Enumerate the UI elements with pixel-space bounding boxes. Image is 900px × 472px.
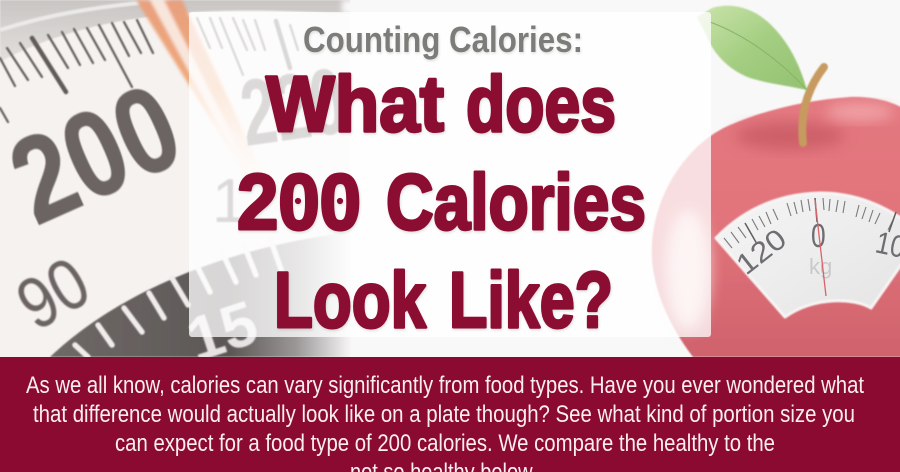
plate major ticks [745, 198, 896, 244]
dark dial arc [50, 232, 350, 357]
stem [802, 67, 824, 143]
illustration: apple with scale [652, 6, 900, 357]
needle [136, 0, 262, 176]
number 220: 220 [234, 47, 351, 166]
plate number 0: 0 [811, 218, 826, 255]
headline line 3 [274, 255, 613, 344]
apple dimple shadow [735, 122, 845, 150]
title block [237, 19, 646, 344]
dial arc numbers: 15 [179, 288, 266, 375]
number 90: 90 [4, 243, 103, 346]
headline line 2: 200 [237, 157, 361, 246]
headline line 3: Like? [449, 255, 613, 344]
headline line 2: Calories [386, 157, 646, 246]
headline line 1 [266, 59, 616, 148]
headline line 1: What [266, 59, 444, 148]
apple left highlight [666, 210, 710, 330]
headline line 1: does [466, 59, 616, 148]
plate unit: kg [809, 254, 832, 279]
plate pointer [815, 200, 826, 296]
apple body [652, 97, 900, 357]
leaf vein [710, 22, 807, 90]
scale plate [716, 193, 900, 317]
dial arc ticks [75, 238, 284, 357]
number 1: 1 [212, 167, 246, 236]
headline line 2 [237, 157, 646, 246]
plate ticks [724, 198, 893, 248]
headline line 3: Look [274, 255, 427, 344]
intro text: can expect for a food type of 200 calories. We compare the healthy to the [115, 430, 775, 457]
translucent title panel [189, 12, 711, 337]
kicker: Counting Calories: Counting Calories: [303, 19, 583, 60]
intro text [26, 372, 864, 472]
dial ticks [0, 18, 298, 122]
illustration: bathroom scale dial [0, 0, 900, 375]
intro band [0, 357, 900, 472]
apple highlight [826, 103, 894, 121]
plate number 120: 120 [731, 223, 793, 282]
leaf [697, 6, 807, 90]
